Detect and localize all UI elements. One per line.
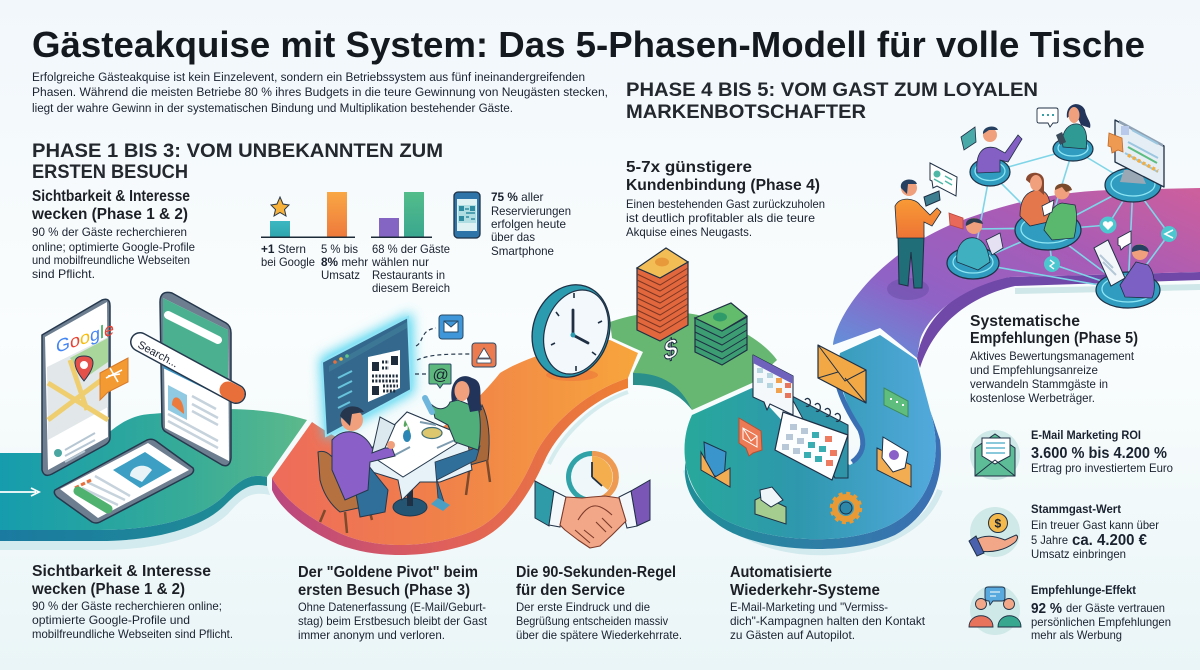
text block: 90 second rule: Der erste Eindruck und die (516, 600, 650, 614)
icon: calendar (775, 395, 848, 480)
text block: visibility bottom: optimierte Google-Profile und (32, 613, 190, 627)
node: monitor (1105, 120, 1164, 202)
icon: at sign bubble: @ (432, 367, 449, 384)
text block: loyalty: ist deutlich profitabler als die teure (626, 211, 815, 225)
text block: automated return: zu Gästen auf Autopilot. (730, 628, 855, 642)
text block: visibility top: Sichtbarkeit & Interesse (32, 188, 190, 205)
band: phase 3 light edge (549, 392, 628, 464)
bar chart: guest choice (371, 192, 432, 238)
heading: phase 1 to 3 (32, 141, 443, 183)
stat: referral effect (969, 583, 1171, 642)
node: center couple (1015, 173, 1081, 250)
text block: visibility top (31, 188, 195, 281)
heading: phase 1 to 3: PHASE 1 BIS 3: VOM UNBEKANNTEN ZUM (32, 141, 443, 162)
text block: automated return: dich"-Kampagnen halten den Kontakt (730, 614, 926, 628)
stat: referral effect: mehr als Werbung (1031, 628, 1122, 642)
icon: handshake with clock (535, 451, 650, 548)
text block: visibility bottom: mobilfreundliche Webseiten sind Pflicht. (32, 627, 233, 641)
stat: regular guest value: Ein treuer Gast kann über (1031, 518, 1159, 532)
icon: red mail bubble (739, 418, 762, 456)
text block: smartphone stat: Reservierungen (491, 204, 571, 218)
icon: two people and chat (969, 585, 1021, 635)
stat labels: 8% mehr (321, 255, 368, 269)
text block: smartphone stat: 75 % aller (491, 190, 544, 204)
intro text: liegt der wahre Gewinn in der systematischen Bindung und Multiplikation bestehender Gäste. (32, 101, 513, 115)
heading: phase 4 to 5: PHASE 4 BIS 5: VOM GAST ZUM LOYALEN (626, 80, 1038, 101)
text block: smartphone stat: über das (491, 230, 535, 244)
QR screen (322, 317, 411, 436)
band: phase 4 rim (633, 373, 692, 410)
stat labels: wählen nur (371, 255, 429, 269)
stat labels: diesem Bereich (372, 281, 450, 295)
callout: orange bubble (100, 358, 128, 400)
person: woman with phone (425, 376, 482, 511)
text block: 90 second rule (516, 564, 682, 642)
icon: envelope blue (701, 442, 730, 487)
text block: visibility top: wecken (Phase 1 & 2) (31, 206, 188, 223)
band: automation blob rim (685, 410, 941, 549)
text block: automated return (730, 564, 926, 642)
arrow: start (0, 488, 39, 496)
icon: share badge (1161, 226, 1177, 242)
node: person pointing (961, 127, 1022, 186)
text block: visibility top: sind Pflicht. (32, 267, 95, 281)
network: referral nodes (887, 104, 1177, 308)
stat labels: Umsatz (321, 268, 360, 282)
text block: loyalty (626, 159, 825, 239)
icon: mail (439, 315, 463, 339)
text block: smartphone stat: Smartphone (491, 244, 554, 258)
stat: email ROI: 3.600 % bis 4.200 % (1031, 445, 1167, 462)
cuff left (535, 481, 554, 526)
icon: heart badge (1100, 216, 1116, 234)
chair: man (318, 451, 372, 533)
dashed connectors (415, 328, 470, 374)
stat labels: +1 Stern (261, 242, 306, 256)
stat labels: 68 % der Gäste (372, 242, 450, 256)
text block: automated return: Automatisierte (730, 564, 832, 581)
illustration: phones and search (42, 292, 236, 523)
illustration: automation icons (701, 345, 911, 524)
text block: referrals: kostenlose Werbeträger. (970, 391, 1095, 405)
text block: visibility bottom: 90 % der Gäste recherchieren online; (32, 599, 222, 613)
text block: visibility top: und mobilfreundliche Webseiten (32, 253, 190, 267)
intro text: Phasen. Während die meisten Betriebe 80 % ihres Budgets in die teure Gewinnung von Neugästen stecken, (32, 85, 608, 99)
band soft shadow (0, 485, 270, 550)
phone: website (160, 292, 231, 466)
icon: orange envelope (818, 345, 866, 403)
bar: rating (270, 221, 290, 237)
phone: google map: Google (56, 318, 114, 357)
icon: open envelope (877, 437, 911, 487)
text block: 90 second rule: für den Service (516, 582, 625, 599)
bar: revenue (327, 192, 347, 237)
text block: smartphone stat: erfolgen heute (491, 217, 566, 231)
axis (261, 236, 355, 238)
stat: email ROI: Ertrag pro investiertem Euro (1031, 461, 1173, 475)
white cuffs (549, 491, 637, 528)
person: man with tablet (332, 406, 395, 517)
stat: referral effect: 92 % (1031, 600, 1062, 617)
text block: referrals: Aktives Bewertungsmanagement (970, 349, 1135, 363)
stat labels: 5 % bis (321, 242, 358, 256)
stat: email ROI (970, 428, 1173, 480)
stat labels (261, 242, 450, 295)
icon: calendar bubble (753, 355, 793, 415)
text block: loyalty: Akquise eines Neugasts. (626, 225, 752, 239)
band: phase 3 orange (272, 340, 638, 545)
text block: referrals: Systematische (970, 313, 1080, 330)
text block: golden pivot: immer anonym und verloren. (298, 628, 445, 642)
chair: woman (462, 405, 490, 495)
text block: golden pivot (298, 564, 488, 642)
phone: flat profile (54, 439, 194, 523)
band: phase 4 green (610, 312, 777, 410)
icon: gear (832, 494, 860, 522)
text block: loyalty: Kundenbindung (Phase 4) (626, 177, 820, 194)
cuff right (631, 480, 650, 526)
intro text: Erfolgreiche Gästeakquise ist kein Einzelevent, sondern ein Betriebssystem aus fünf ineinandergreifenden (32, 70, 585, 84)
heading: phase 4 to 5 (626, 80, 1038, 123)
icon: star (271, 197, 289, 216)
text block: loyalty: 5-7x günstigere (626, 159, 752, 176)
text block: golden pivot: Ohne Datenerfassung (E-Mail/Geburt- (298, 600, 486, 614)
search bar (136, 339, 236, 394)
stat: regular guest value: Stammgast-Wert (1031, 502, 1121, 516)
band: phase 5 purple (833, 188, 1200, 358)
node: right person (1094, 231, 1160, 308)
bar: green (404, 192, 424, 237)
screen glow (320, 312, 414, 440)
stat: referral effect: der Gäste vertrauen (1066, 601, 1165, 615)
band: automation blob (685, 335, 936, 539)
icon: link badge (1044, 256, 1060, 272)
band: phase 1 teal (0, 409, 307, 530)
text block: referrals: und Empfehlungsanreize (970, 363, 1098, 377)
title: Gästeakquise mit System: Das 5-Phasen-Modell für volle Tische (32, 24, 1145, 65)
table (366, 412, 472, 516)
icon: at sign bubble (429, 364, 451, 388)
stat: regular guest value (969, 502, 1159, 561)
band: blob inner dark edge (838, 385, 863, 462)
stat: referral effect: Empfehlunge-Effekt (1031, 583, 1136, 597)
phone: google map (42, 299, 114, 475)
text block: golden pivot: ersten Besuch (Phase 3) (298, 582, 470, 599)
text block: loyalty: Einen bestehenden Gast zurückzuholen (626, 197, 825, 211)
band: phase 5 light edge (1015, 287, 1200, 291)
search bar: Search... (136, 339, 180, 370)
icon: hand and coin: $ (994, 516, 1002, 530)
stat labels: bei Google (261, 255, 315, 269)
text block: smartphone stat (491, 190, 571, 258)
icon: dollar sign: $ (664, 331, 678, 367)
band: phase 1 teal rim (0, 476, 267, 541)
intro text (32, 70, 608, 115)
heading: phase 1 to 3: ERSTEN BESUCH (32, 162, 188, 183)
standing man (887, 163, 957, 300)
icon: envelope (970, 430, 1020, 480)
text block: automated return: E-Mail-Marketing und "Vermiss- (730, 600, 888, 614)
band: phase 3 rim (272, 378, 628, 555)
network lines (973, 149, 1169, 290)
text block: golden pivot: Der "Goldene Pivot" beim (298, 564, 478, 581)
text block: automated return: Wiederkehr-Systeme (730, 582, 880, 599)
heading: phase 4 to 5: MARKENBOTSCHAFTER (626, 102, 866, 123)
icon: green money stack (695, 303, 747, 365)
illustration: restaurant table with QR screen (318, 312, 496, 533)
axis (371, 236, 432, 238)
node: woman top (1037, 104, 1093, 161)
stat: regular guest value: ca. 4.200 € (1072, 532, 1147, 549)
icon: green chat (884, 388, 908, 417)
icon: clock (520, 275, 622, 387)
text block: referrals (970, 313, 1138, 405)
text block: golden pivot: stag) beim Erstbesuch bleibt der Gast (298, 614, 488, 628)
icon: green envelope (755, 487, 786, 524)
stat: referral effect: persönlichen Empfehlungen (1031, 615, 1171, 629)
text block: 90 second rule: Begrüßung entscheiden massiv (516, 614, 668, 628)
icon: red money stack (637, 248, 688, 341)
text block: referrals: verwandeln Stammgäste in (970, 377, 1108, 391)
text block: visibility top: 90 % der Gäste recherchieren (32, 225, 187, 239)
text block: referrals: Empfehlungen (Phase 5) (970, 330, 1138, 347)
band: blob light shadow (686, 470, 940, 552)
text block: visibility bottom: wecken (Phase 1 & 2) (31, 581, 185, 598)
text block: 90 second rule: Die 90-Sekunden-Regel (516, 564, 676, 581)
journey path: five coloured phase bands (0, 188, 1200, 555)
stat: regular guest value: 5 Jahre (1031, 533, 1068, 547)
icon: hand and coin (969, 507, 1020, 557)
text block: visibility bottom: Sichtbarkeit & Interesse (32, 563, 211, 580)
node: left person (947, 213, 1003, 279)
stat: regular guest value: Umsatz einbringen (1031, 547, 1126, 561)
clock (566, 451, 618, 503)
icon: smartphone with QR (454, 192, 480, 238)
text block: 90 second rule: über die spätere Wiederkehrrate. (516, 628, 682, 642)
text block: visibility top: online; optimierte Google-Profile (32, 240, 195, 254)
stat: email ROI: E-Mail Marketing ROI (1031, 428, 1141, 442)
stat labels: Restaurants in (372, 268, 445, 282)
icon: cake (472, 343, 496, 367)
bar: purple (379, 218, 399, 237)
hands (560, 496, 626, 548)
band: phase 5 purple rim (917, 272, 1200, 368)
text block: visibility bottom (31, 563, 233, 641)
bar chart: star and revenue (261, 192, 355, 238)
